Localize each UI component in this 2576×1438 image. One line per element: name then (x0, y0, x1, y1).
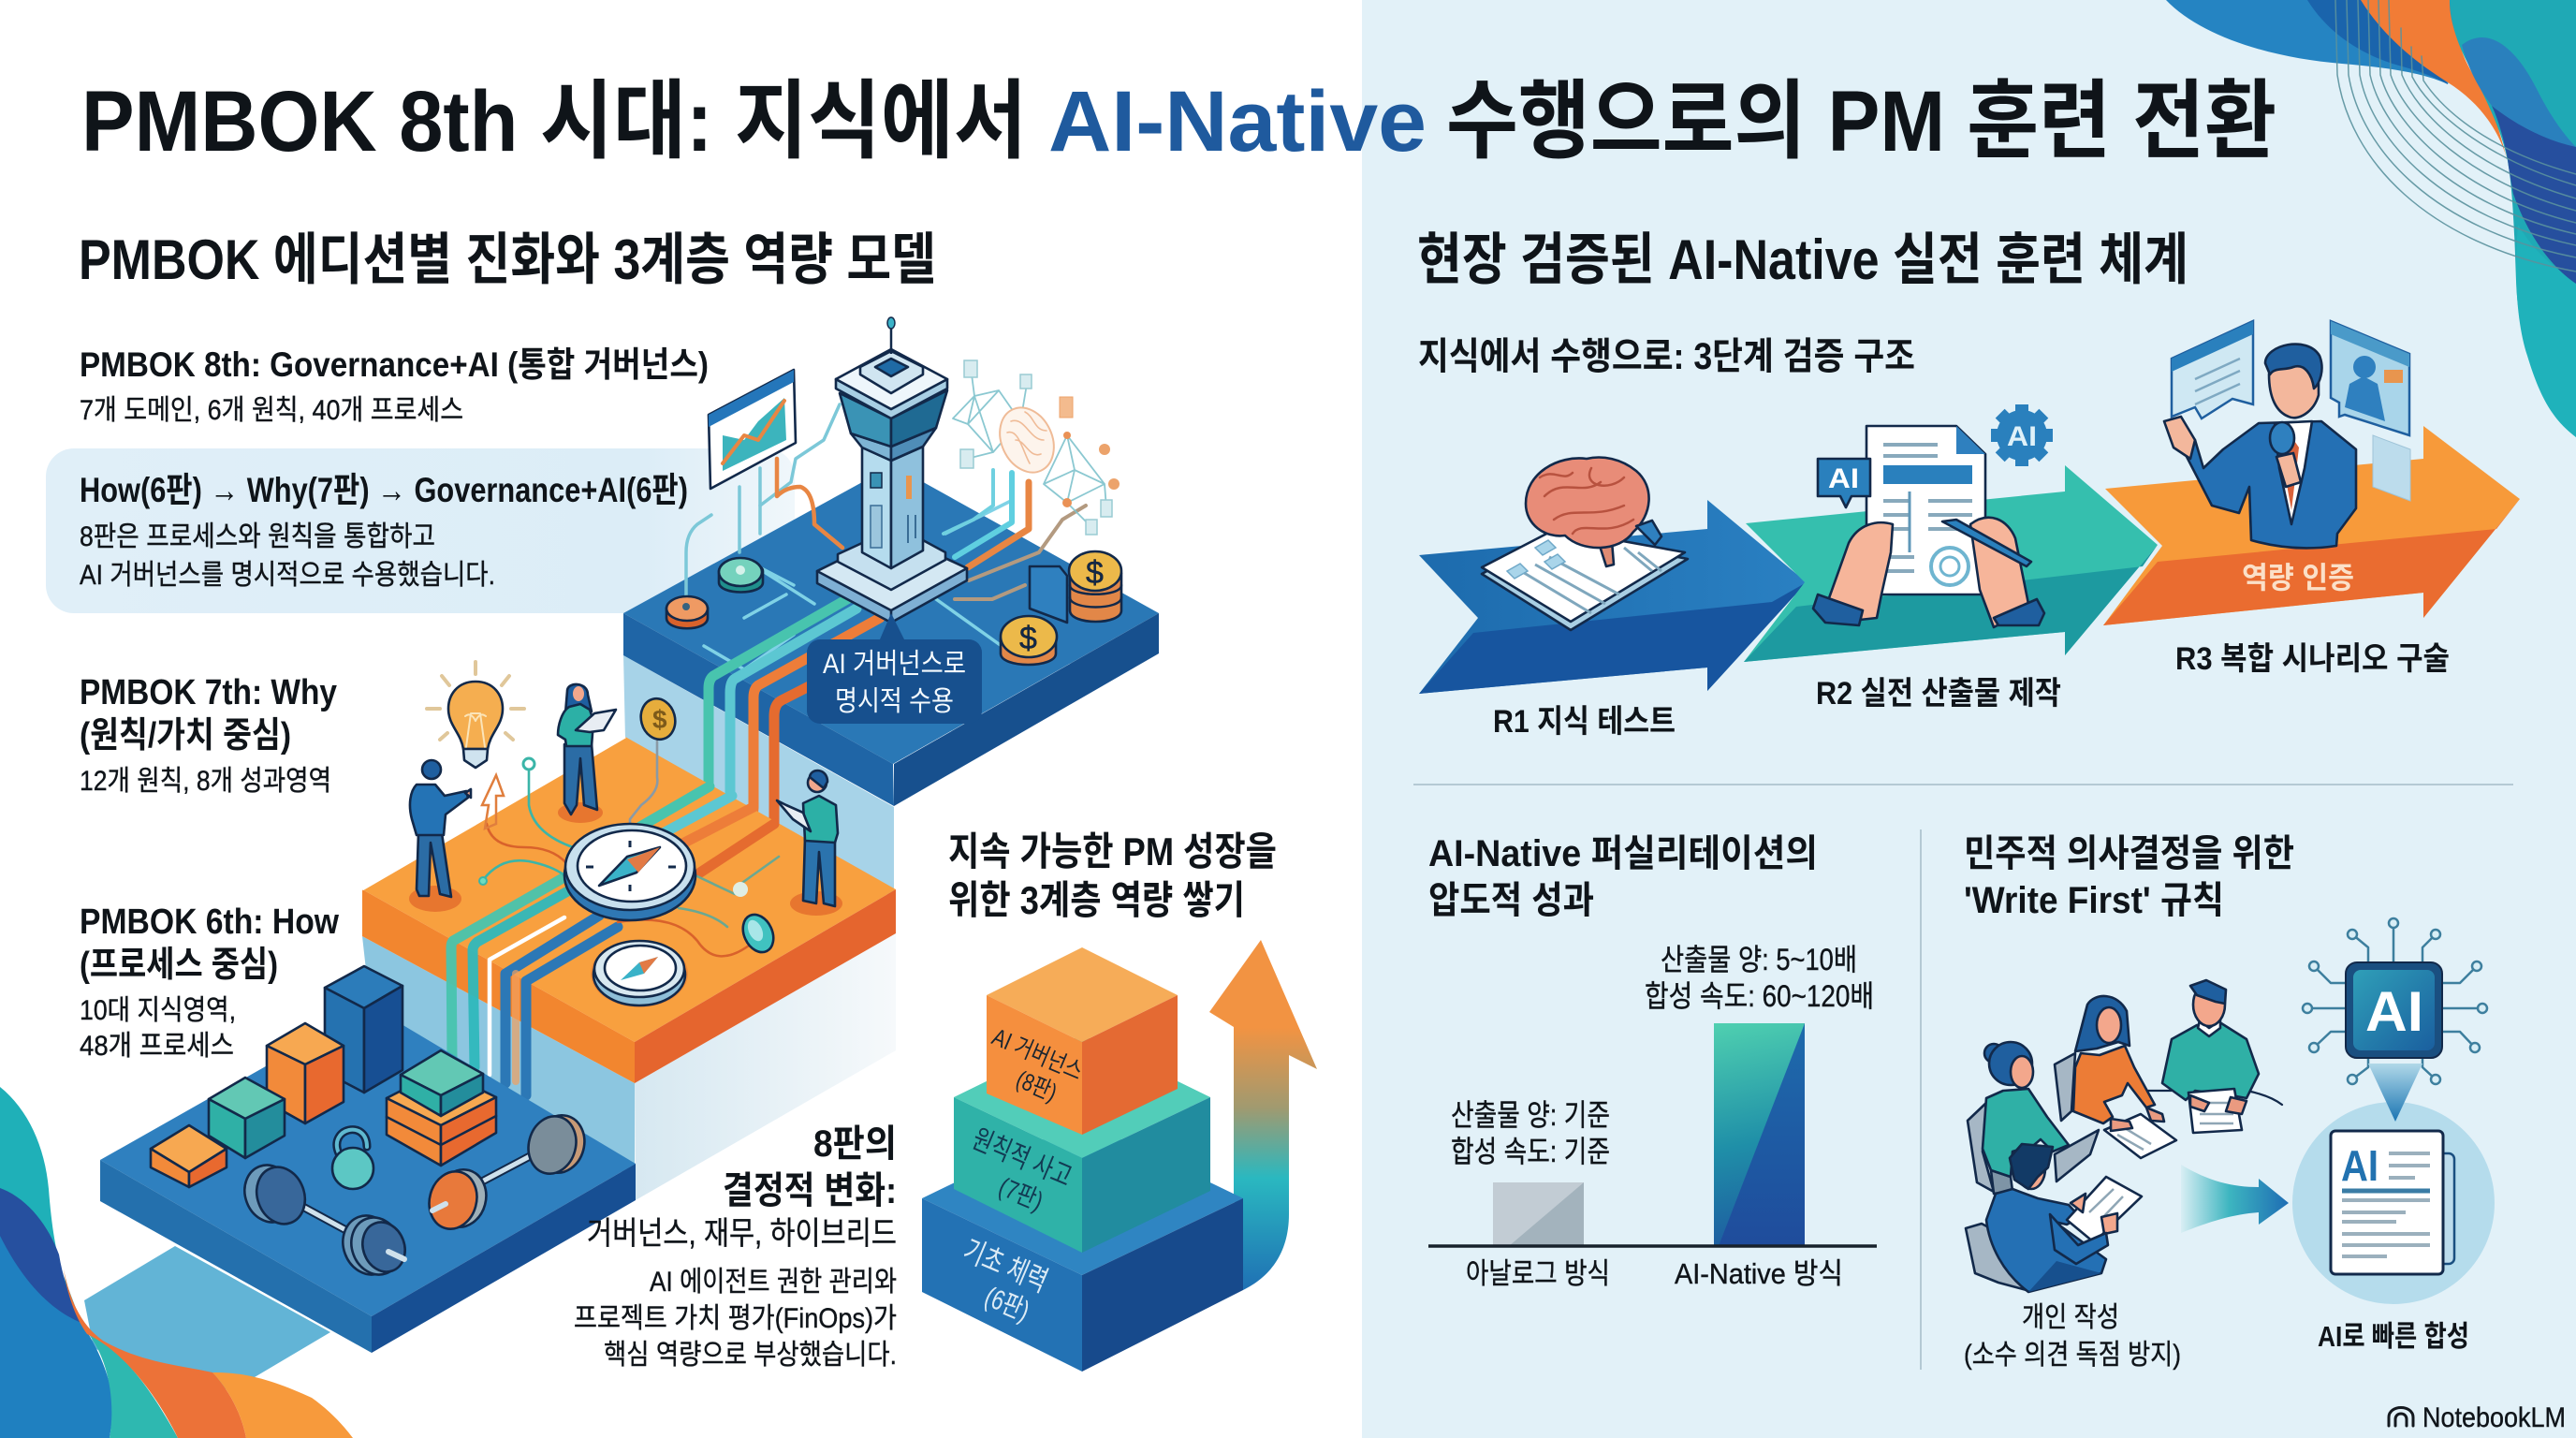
pyramid layer: AI governance (987, 947, 1178, 1135)
text: decisive change in 8th edition: 결정적 변화: (723, 1170, 897, 1211)
icon: gold coin stacks: $ (1086, 555, 1104, 591)
person: front in blue (1966, 1144, 2142, 1292)
heading: write first rule (1964, 833, 2294, 921)
icon: team individually writing (1966, 980, 2282, 1292)
bar chart: analog vs AI-Native (1428, 943, 1877, 1290)
text: evolution summary: AI 거버넌스를 명시적으로 수용했습니다. (80, 560, 495, 591)
text: evolution summary: 8판은 프로세스와 원칙을 통합하고 (80, 521, 435, 552)
pyramid layer: principles: 원칙적 사고 (968, 1123, 1076, 1193)
panel: edition shift callout (46, 448, 795, 613)
illustration: circuit traces on orange platform (483, 741, 779, 956)
icon: blue tall block (325, 966, 402, 1093)
callout: AI governance: AI 거버넌스로 (823, 649, 966, 680)
heading: left section: PMBOK 에디션별 진화와 3계층 역량 모델 (79, 228, 936, 291)
icon: blue barbell (237, 1158, 412, 1282)
icon: lightbulb (427, 662, 524, 768)
text: PMBOK 7th: (원칙/가치 중심) (80, 716, 291, 756)
text: decisive change in 8th edition (574, 1123, 897, 1371)
text: decisive change in 8th edition: 핵심 역량으로 부상했습니다. (604, 1340, 897, 1371)
illustration: main compass (564, 824, 695, 920)
label: individual writing (1964, 1302, 2181, 1371)
heading: facilitation performance: AI-Native 퍼실리테이션의 (1428, 833, 1818, 874)
icon: gold coin stacks (1001, 551, 1121, 665)
pyramid layer: principles: (7판) (995, 1172, 1047, 1216)
text: PMBOK 7th: 12개 원칙, 8개 성과영역 (80, 766, 331, 797)
illustration: small compass (591, 940, 688, 1007)
bar: AI-Native (1714, 1023, 1805, 1246)
decorative dividers (1413, 785, 2513, 1370)
heading: facilitation performance: 압도적 성과 (1428, 880, 1594, 921)
label: R1: R1 지식 테스트 (1493, 704, 1676, 740)
axis label: analog: 아날로그 방식 (1466, 1257, 1610, 1290)
values: AI-Native (1645, 943, 1874, 1013)
text: PMBOK 6th: (프로세스 중심) (80, 946, 278, 985)
bar: analog (1493, 1182, 1584, 1246)
heading: write first rule: 'Write First' 규칙 (1964, 880, 2224, 921)
icon: AI speech bubble: AI (1828, 463, 1859, 494)
arrow: R1 (1419, 500, 1807, 694)
person: center in orange (2055, 996, 2176, 1158)
callout: AI governance (807, 613, 982, 724)
icon: gold coin stacks: $ (1019, 621, 1037, 656)
text: decisive change in 8th edition: AI 에이전트 권한 관리와 (650, 1267, 897, 1298)
illustration: lower blue platform (100, 1006, 636, 1353)
heading: three-layer capability: 지속 가능한 PM 성장을 (948, 829, 1277, 873)
icon: AI speech bubble (1818, 459, 1870, 507)
icon: AI synthesized document (2331, 1131, 2454, 1274)
axis label: AI-Native: AI-Native 방식 (1675, 1257, 1843, 1290)
label: R3: R3 복합 시나리오 구술 (2175, 641, 2450, 677)
icon: AI gear: AI (2007, 421, 2037, 452)
illustration: AI brain network (953, 360, 1120, 535)
icon: AI chip (2303, 918, 2487, 1084)
icon: control tower (817, 317, 967, 623)
icon: small orange block (151, 1125, 227, 1187)
pyramid layer: AI governance: AI 거버넌스 (988, 1022, 1087, 1085)
icon: hanging dollar coin: $ (652, 705, 667, 734)
values: AI-Native: 합성 속도: 60~120배 (1645, 979, 1874, 1013)
icon: presenter with screens (2164, 321, 2410, 548)
text: evolution summary: How(6판) → Why(7판) → Governance+AI(6판) (80, 471, 688, 509)
icon: stacked blocks (387, 1050, 496, 1166)
illustration: middle orange platform (362, 737, 896, 1083)
icon: AI synthesized document: AI (2341, 1141, 2378, 1190)
values: analog: 산출물 양: 기준 (1451, 1098, 1610, 1132)
text: PMBOK 7th (80, 673, 337, 797)
illustration: data monitor (686, 370, 842, 599)
icon: orange barbell (423, 1109, 591, 1234)
icon: hanging dollar coin (637, 695, 680, 743)
icon: small circuit nodes on orange platform (479, 758, 748, 897)
person: top right in green (2162, 980, 2259, 1133)
illustration: wall between top and middle platform (362, 655, 896, 1200)
heading: three-layer capability: 위한 3계층 역량 쌓기 (948, 878, 1245, 922)
icon: person left with gesture (409, 760, 471, 912)
text: decisive change in 8th edition: 8판의 (813, 1123, 897, 1165)
heading: right section: 현장 검증된 AI-Native 실전 훈련 체계 (1417, 228, 2188, 291)
icon: deliverable document with hands (1813, 426, 2044, 627)
heading: write first rule: 민주적 의사결정을 위한 (1964, 833, 2294, 874)
panel: AI synthesis circle (2292, 1102, 2495, 1304)
arrow: R3: 역량 인증 (2242, 561, 2354, 594)
icon: kettlebell (332, 1130, 373, 1189)
pyramid layer: principles (954, 1034, 1210, 1253)
title (81, 74, 2276, 169)
heading: three-step verification: 지식에서 수행으로: 3단계 검증 구조 (1418, 336, 1915, 377)
label: AI synthesis: AI로 빠른 합성 (2318, 1320, 2469, 1353)
pyramid layer: AI governance: (8판) (1012, 1064, 1061, 1107)
text: PMBOK 6th (80, 902, 339, 1062)
arrow: R3 (2103, 426, 2520, 625)
arrow: chip to document (2368, 1064, 2422, 1122)
text: PMBOK 6th: 48개 프로세스 (80, 1031, 234, 1062)
icon: sensor discs on top platform (666, 558, 763, 628)
illustration: light blue ribbon under platform (84, 1246, 330, 1395)
text: PMBOK 8th: PMBOK 8th: Governance+AI (통합 거버넌스) (80, 345, 709, 384)
values: analog (1451, 1098, 1610, 1168)
icon: knowledge test brain (1482, 458, 1688, 630)
title: PMBOK 8th 시대: 지식에서 (81, 74, 1027, 169)
decoration: bottom left waves (0, 1087, 353, 1438)
text: PMBOK 8th: 7개 도메인, 6개 원칙, 40개 프로세스 (80, 395, 463, 426)
label: individual writing: (소수 의견 독점 방지) (1964, 1340, 2181, 1371)
arrow: growth (1209, 940, 1317, 1290)
values: analog: 합성 속도: 기준 (1451, 1135, 1610, 1168)
callout: AI governance: 명시적 수용 (835, 686, 954, 717)
chart: three layer pyramid (922, 947, 1243, 1372)
text: decisive change in 8th edition: 프로젝트 가치 평가(FinOps)가 (574, 1303, 897, 1334)
text: decisive change in 8th edition: 거버넌스, 재무, 하이브리드 (587, 1216, 897, 1252)
values: AI-Native: 산출물 양: 5~10배 (1661, 943, 1857, 976)
text: PMBOK 7th: PMBOK 7th: Why (80, 673, 337, 712)
icon: orange tall block (267, 1023, 344, 1123)
text: evolution summary (80, 471, 688, 591)
title: AI-Native (1048, 74, 1427, 169)
pyramid layer: foundation (922, 1121, 1243, 1372)
illustration: top blue platform (623, 465, 1159, 806)
person: left in green (1968, 1042, 2099, 1194)
pyramid layer: foundation: (6판) (980, 1282, 1033, 1328)
title: 수행으로의 PM 훈련 전환 (1446, 74, 2276, 169)
text: PMBOK 6th: 10대 지식영역, (80, 995, 236, 1026)
illustration: flowing governance ribbons (655, 599, 880, 873)
heading: facilitation performance (1428, 833, 1818, 921)
label: individual writing: 개인 작성 (2022, 1302, 2119, 1333)
pyramid layer: foundation: 기초 체력 (959, 1233, 1053, 1299)
text: PMBOK 6th: PMBOK 6th: How (80, 902, 339, 942)
label: R2: R2 실전 산출물 제작 (1816, 676, 2061, 712)
arrow: to AI synthesis (2181, 1165, 2289, 1233)
icon: woman holding paper (558, 684, 616, 823)
icon: AI gear (1991, 404, 2053, 466)
text: PMBOK 8th (80, 345, 709, 426)
icon: teal lens (738, 910, 779, 957)
illustration: ribbons down to lower platform (451, 877, 618, 1095)
icon: person reading tablet (777, 770, 842, 916)
arrow: R2 (1744, 465, 2158, 662)
panel: right background (1362, 0, 2576, 1438)
heading: three-layer capability (948, 829, 1277, 922)
decoration: top right waves (2166, 0, 2576, 437)
icon: AI chip: AI (2365, 980, 2423, 1043)
icon: teal cube (209, 1078, 285, 1158)
